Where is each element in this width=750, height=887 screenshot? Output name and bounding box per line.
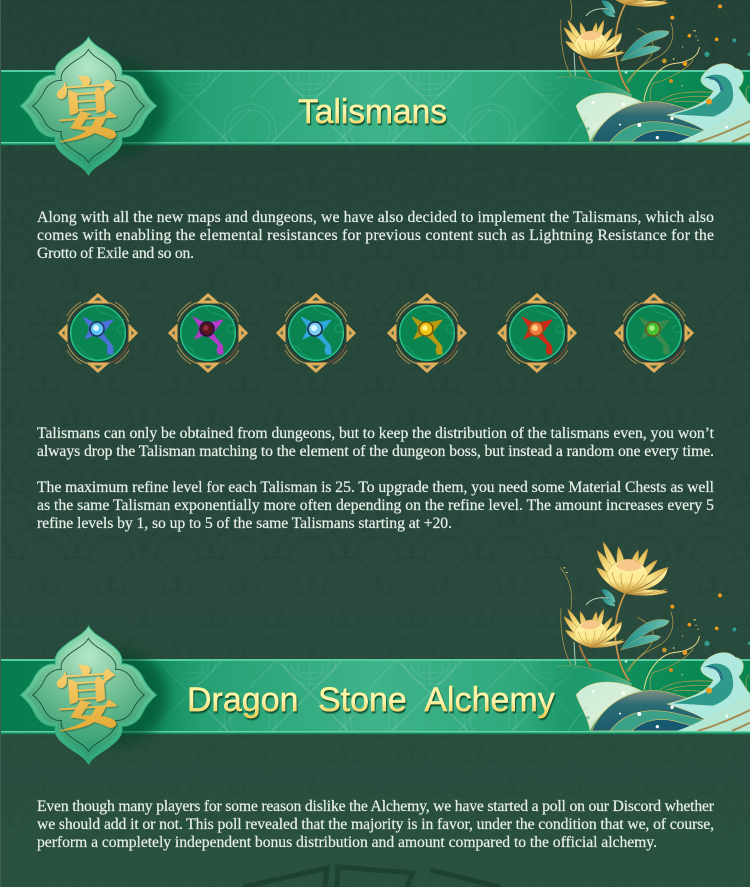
floral and wave ornament, lower banner (557, 540, 750, 733)
icon: earth talisman (389, 295, 465, 371)
medallion emblem, lower banner (20, 626, 168, 764)
medallion emblem, lower banner: 宴 (54, 660, 126, 741)
floral and wave ornament, top banner (557, 0, 750, 144)
paragraph: alchemy poll: Even though many players for some reason dislike the Alchemy, we have started a poll on our Discord whether (37, 798, 715, 815)
paragraph: refining talismans: as the same Talisman exponentially more often depending on the refine level. The amount increases every 5 (37, 497, 714, 514)
medallion emblem, top banner (20, 37, 168, 175)
icon: fire talisman (499, 295, 575, 371)
intro paragraph: Along with all the new maps and dungeons, we have also decided to implement the Talismans, which also (37, 209, 714, 226)
banner: Dragon Stone Alchemy (1, 540, 750, 764)
intro paragraph: Grotto of Exile and so on. (37, 245, 194, 262)
paragraph: obtaining talismans: Talismans can only be obtained from dungeons, but to keep the distribution of the talismans even, you won’t (37, 425, 715, 442)
paragraph: obtaining talismans: always drop the Talisman matching to the element of the dungeon boss, but instead a random one every time. (37, 443, 714, 460)
icon: wind talisman (616, 295, 692, 371)
paragraph: refining talismans: refine levels by 1, so up to 5 of the same Talismans starting at +20. (37, 515, 452, 532)
heading: Dragon Stone Alchemy: Dragon Stone Alchemy (187, 681, 555, 719)
paragraph: refining talismans: The maximum refine level for each Talisman is 25. To upgrade them, you need some Material Chests as well (37, 479, 715, 496)
paragraph: obtaining talismans (37, 425, 715, 460)
talisman icon row (60, 295, 692, 371)
icon: ice talisman (278, 295, 354, 371)
paragraph: alchemy poll (37, 798, 715, 851)
banner: Talismans (1, 0, 750, 175)
paragraph: alchemy poll: perform a completely independent bonus distribution and amount compared to the official alchemy. (37, 834, 657, 851)
heading: Talismans: Talismans (298, 93, 447, 131)
medallion emblem, top banner: 宴 (54, 71, 126, 152)
intro paragraph (37, 209, 714, 262)
icon: dark talisman (170, 295, 246, 371)
paragraph: alchemy poll: we should add it or not. This poll revealed that the majority is in favor, under the condition that we, of course, (37, 816, 714, 833)
paragraph: refining talismans (37, 479, 715, 532)
icon: lightning talisman (60, 295, 136, 371)
intro paragraph: comes with enabling the elemental resistances for previous content such as Lightning Resistance for the (37, 227, 714, 244)
